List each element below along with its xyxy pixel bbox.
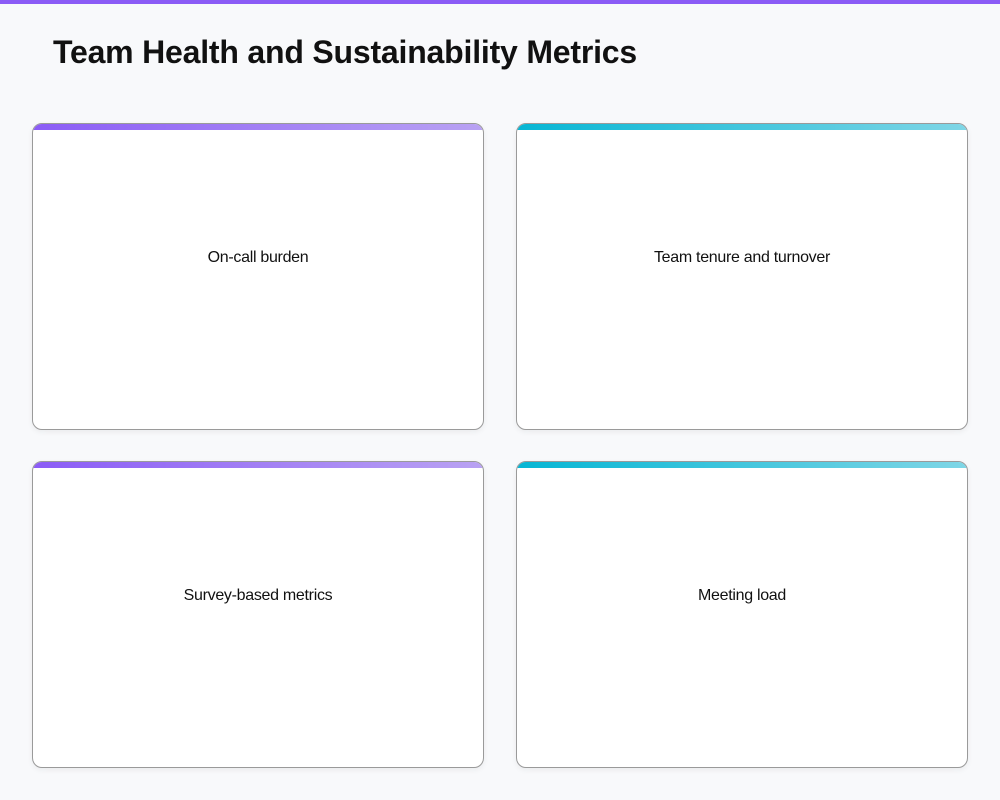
panel: on-call burden: [32, 123, 484, 430]
label: survey: Survey-based metrics: [184, 587, 332, 604]
panel: meeting load: [516, 461, 968, 768]
panel: team tenure: [516, 123, 968, 430]
label: team tenure: Team tenure and turnover: [654, 249, 830, 266]
panel: survey: [32, 461, 484, 768]
label: meeting load: Meeting load: [698, 587, 786, 604]
title: Team Health and Sustainability Metrics: [53, 34, 637, 70]
label: on-call burden: On-call burden: [208, 249, 308, 266]
